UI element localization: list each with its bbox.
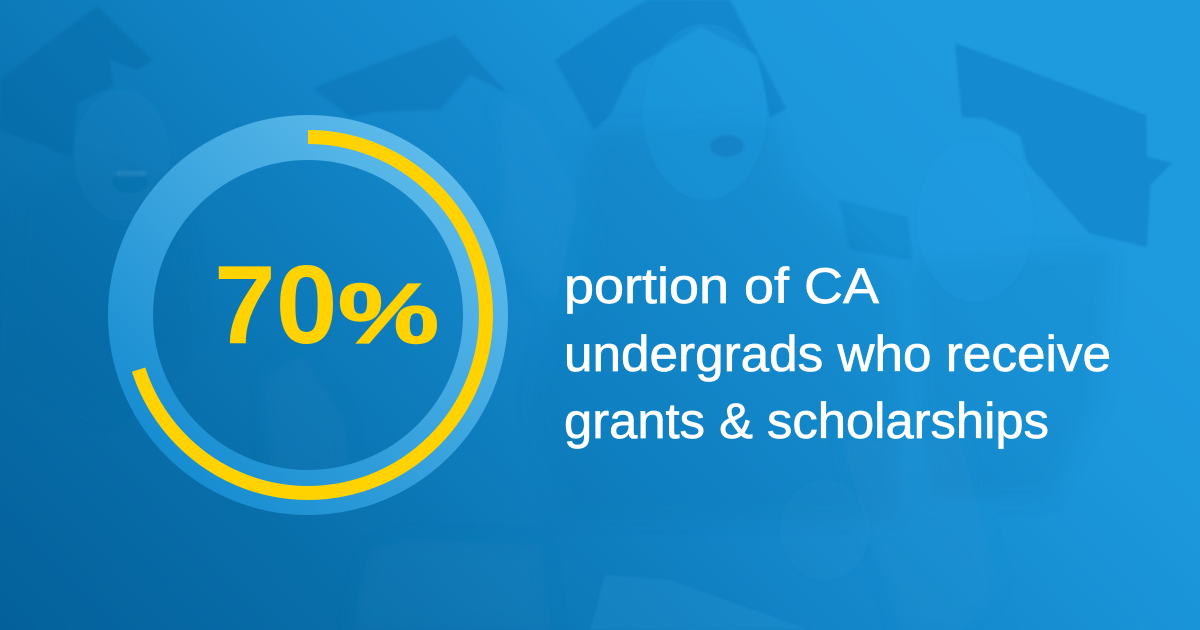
donut chart: 70 percent bbox=[130, 137, 486, 493]
background photo: blurred gowns and skin tones bbox=[10, 95, 1110, 630]
graduation cap centre bbox=[555, 0, 786, 130]
raised arm lower right bbox=[840, 440, 1000, 630]
open mouth centre bbox=[710, 135, 744, 157]
line two: undergrads who receive bbox=[564, 326, 1111, 382]
donut track bbox=[130, 138, 486, 492]
face right bbox=[917, 138, 1033, 302]
description text bbox=[564, 258, 1111, 449]
lower sleeve right bbox=[780, 480, 870, 580]
bottom shoulder bbox=[352, 540, 551, 630]
big number bbox=[214, 243, 439, 367]
digits 70: 70 bbox=[214, 243, 337, 367]
gown shadows bbox=[10, 120, 1110, 520]
line one: portion of CA bbox=[564, 258, 880, 314]
graduation cap centre-left bbox=[313, 35, 507, 117]
donut value arc bbox=[130, 137, 486, 493]
face left bbox=[74, 89, 170, 221]
lower arm bbox=[590, 575, 810, 630]
graduation cap left bbox=[0, 6, 153, 157]
raised hand centre bbox=[500, 95, 595, 320]
teeth left bbox=[116, 171, 146, 176]
raised hand in ring bbox=[265, 350, 350, 475]
percent sign: % bbox=[338, 267, 439, 362]
graduation cap right bbox=[955, 43, 1172, 247]
open mouth left bbox=[112, 171, 148, 193]
small cap bbox=[839, 200, 912, 260]
line three: grants & scholarships bbox=[564, 393, 1049, 449]
face centre bbox=[643, 24, 767, 200]
